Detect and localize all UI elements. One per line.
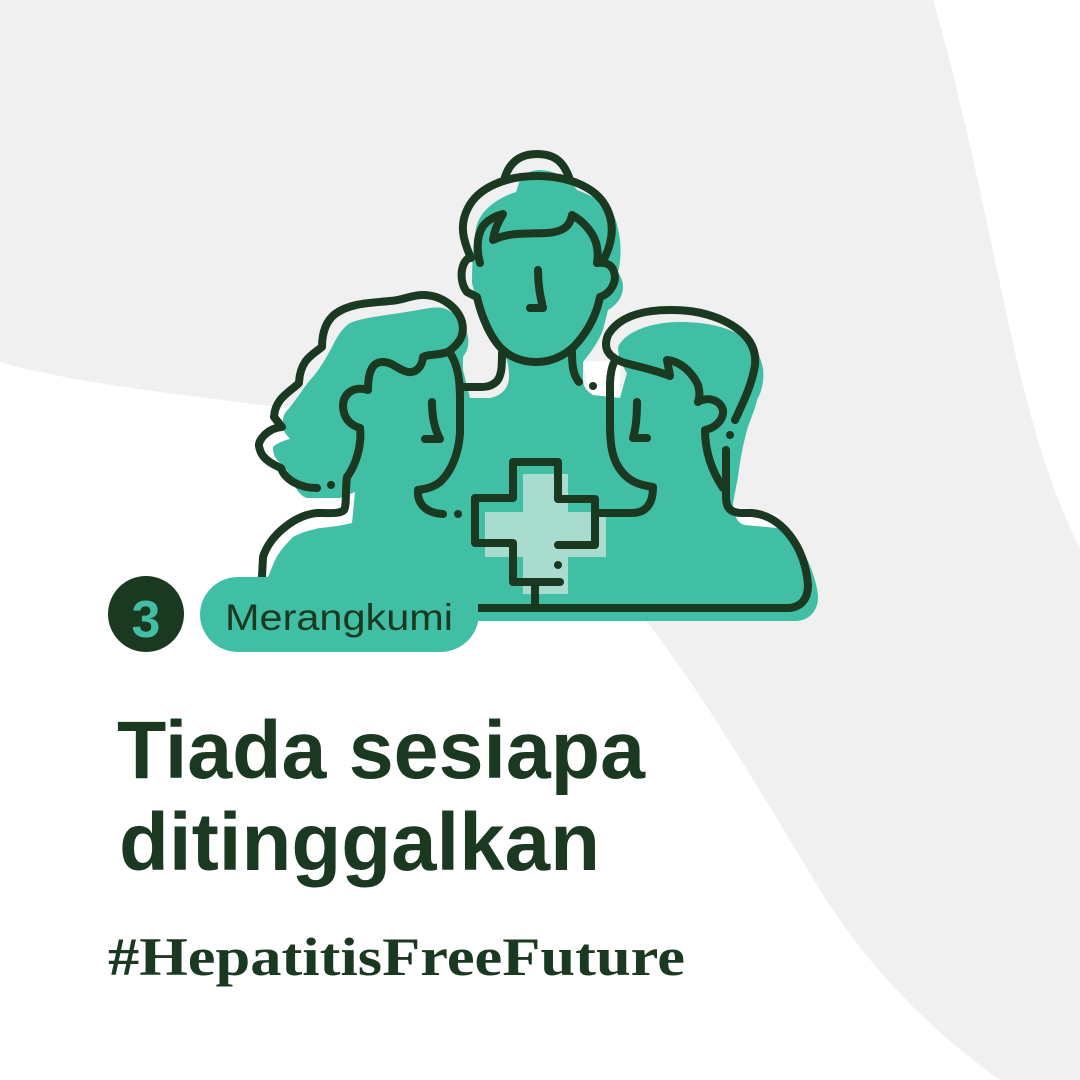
category pill [200,577,478,652]
step number badge: 3 [132,591,160,649]
right person: man [477,310,808,608]
illustration: three people with medical cross [250,154,818,621]
dot near woman's neck [589,382,597,390]
title: Tiada sesiapa [117,705,646,796]
left person: woman with curly hair [259,295,463,577]
woman: centre figure [462,154,615,387]
dot beside right person [726,431,734,439]
title: ditinggalkan [119,797,600,888]
step number badge [108,576,184,652]
hashtag: #HepatitisFreeFuture [108,927,685,987]
teal silhouette fill [250,170,818,621]
title [117,705,646,888]
white gaps behind figures [583,360,780,535]
category pill: Merangkumi [225,597,453,638]
dots beside left person [327,481,462,518]
medical cross light fill [485,474,606,594]
dot inside medical cross [554,561,562,569]
medical cross outline [475,462,595,608]
